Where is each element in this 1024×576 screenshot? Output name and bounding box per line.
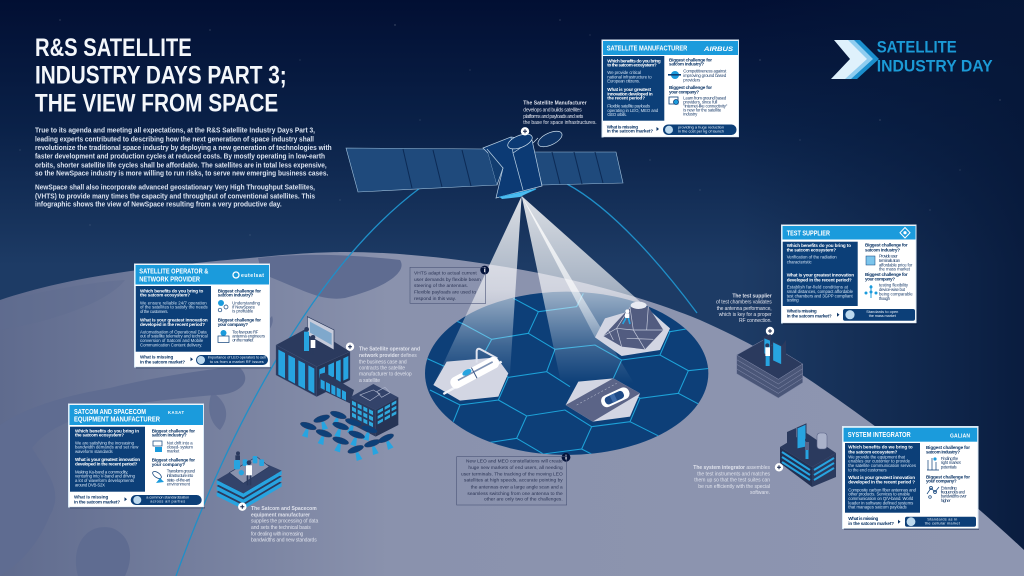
card: satcom and spacecom equipment manufacturer (68, 404, 205, 508)
logo: Satellite Industry Day: INDUSTRY DAY (877, 58, 993, 76)
card: system integrator (842, 426, 979, 530)
left panel: developed in the recent period ? (848, 480, 915, 485)
right column: bandwidths ever (941, 494, 967, 499)
header: SYSTEM INTEGRATOR (848, 430, 911, 439)
right column: your company? (669, 89, 699, 94)
text: satellite manufacturer (523, 101, 597, 126)
small building (350, 384, 398, 437)
right column: your company? (218, 322, 248, 327)
illustration: satcom lab stack (217, 451, 282, 509)
text box: VHTS: respond in this way. (414, 296, 456, 302)
right column: is profitable (232, 309, 254, 314)
right column: environment (167, 482, 191, 487)
right column: your company? (865, 277, 895, 282)
bottom bar: What is missing (140, 355, 173, 360)
header (70, 405, 203, 425)
bottom bar (787, 309, 915, 321)
intro text (35, 128, 332, 209)
right column (668, 57, 728, 116)
header (844, 428, 977, 442)
left panel: that manages satcom payloads (848, 505, 907, 510)
text: satellite operator: The Satellite operator and (359, 347, 420, 353)
intro text: faster development and production cycles at reduced costs. By mostly operating in low-earth (35, 154, 325, 161)
text: satcom manufacturer: supplies the processing of data (251, 519, 319, 525)
dish antennas (506, 128, 564, 152)
right column (926, 445, 970, 503)
left panel: the satcom ecosystem? (848, 449, 897, 454)
left panel (70, 427, 145, 492)
marker: test supplier (766, 327, 774, 335)
left panel: What is your greatest innovation (787, 273, 854, 278)
right column: Too few pure RF (232, 329, 259, 334)
header (603, 41, 738, 55)
text: satcom manufacturer: bandwidths and new standards (251, 538, 317, 544)
header: eutelsat (241, 273, 264, 279)
left panel: Which benefits do you bring to (140, 288, 203, 293)
right column: Biggest challenge for (669, 85, 712, 90)
right column: satcom industry? (865, 247, 900, 252)
bottom bar (848, 516, 976, 527)
right column (218, 288, 265, 343)
right column: higher (941, 498, 951, 503)
left panel: We ensure reliable 24/7 operation (140, 300, 207, 305)
left panel: Which benefits do we bring to (848, 445, 913, 450)
right column: satcom industry? (218, 293, 253, 298)
left panel: the satellite communication services (848, 463, 916, 468)
left panel: the satcom ecosystem? (75, 433, 124, 438)
header: EQUIPMENT MANUFACTURER (74, 414, 161, 424)
right column: industry (683, 111, 698, 116)
body (483, 137, 542, 199)
text box: VHTS: steering of the antennas. (414, 283, 468, 289)
title: INDUSTRY DAYS PART 3; (35, 62, 287, 90)
text: satcom manufacturer: The Satcom and Spacecom (251, 506, 317, 512)
text: satcom manufacturer: for dealing with increasing (251, 531, 304, 537)
bottom bar: What is missing (74, 495, 108, 500)
left panel: innovation developed in (607, 91, 653, 96)
left panel: operating in LEO, MEO and (607, 108, 659, 113)
left panel: leader in software defined systems (848, 500, 913, 505)
text: satellite operator: a satellite (359, 378, 380, 384)
intro text: infographic shows the view of NewSpace resulting from a very productive day. (35, 202, 282, 209)
right column: satcom industry? (152, 433, 187, 438)
text: system integrator: the test instruments and matches (697, 471, 770, 477)
right column: closed- system (167, 444, 193, 449)
right column: providers, since full (683, 99, 717, 104)
right column: Biggest challenge for (865, 272, 908, 277)
right column: Finding the (941, 456, 959, 461)
intro text: orbits, shorter satellite life cycles shall be affordable. The satellites are in total less expensive, (35, 162, 327, 169)
logo: Satellite Industry Day: SATELLITE (877, 39, 957, 57)
platform: car on road (566, 378, 640, 422)
bottom bar: in the satcom market? (848, 521, 894, 526)
left panel: Which benefits do you bring in (75, 428, 139, 433)
right column: testing flexibility (879, 283, 909, 288)
text: test supplier: RF connection. (739, 318, 772, 324)
bottom bar: providing a huge reduction (678, 125, 724, 130)
text: test supplier: of test chambers validates (716, 299, 772, 305)
left panel: communication on Q/V-band. World (848, 496, 914, 501)
right column: antenna engineers (232, 333, 265, 338)
left panel: bandwidth demands and set new (75, 445, 139, 450)
text box: LEO and MEO (457, 457, 567, 505)
right column: frequencies and (941, 489, 966, 494)
left panel: the satcom ecosystem? (787, 247, 836, 252)
bottom bar: Importance of LEO operators to sell (208, 355, 266, 360)
left panel (783, 242, 858, 306)
right column: Biggest challenge for (865, 243, 908, 248)
text box: LEO and MEO: satellites at high speeds, accurate pointing by (464, 478, 563, 484)
platform: mountain hiker (595, 302, 670, 356)
right column: terminals at an (879, 258, 901, 263)
text: test supplier: The test supplier (732, 293, 772, 299)
text box: LEO and MEO: user terminals. The tracking of the moving LEO (461, 472, 563, 478)
left panel: We provide the equipment that (848, 454, 906, 459)
header: SATELLITE MANUFACTURER (607, 44, 688, 52)
left panel: What is your greatest innovation (140, 317, 208, 322)
right column: Biggest challenge for (218, 288, 261, 293)
text: satellite manufacturer: The Satellite Manufacturer (523, 101, 587, 107)
left solar panel (346, 148, 497, 192)
left panel: venturing into V-band and driving (75, 474, 136, 479)
title: THE VIEW FROM SPACE (35, 90, 278, 118)
text: system integrator: them up so that the test suites can (694, 478, 770, 484)
text: satellite manufacturer: develops and builds satellites (523, 107, 582, 113)
bottom bar (140, 355, 268, 365)
marker: operator (346, 342, 354, 351)
text box: VHTS: VHTS adapt to actual current (414, 270, 477, 276)
left panel: Which benefits do you bring (607, 58, 661, 63)
card: satellite manufacturer (602, 40, 740, 138)
left panel: testing (787, 297, 799, 302)
right column: Biggest challenge for (926, 445, 970, 450)
left panel: other products. Services to enable (848, 492, 911, 497)
right column: Biggest challenge for (218, 318, 261, 323)
card: satellite operator and network provider (134, 264, 271, 368)
left panel: to the end customers (848, 467, 887, 472)
right column: improving ground based (683, 73, 727, 78)
card: test supplier (782, 225, 917, 324)
text box: LEO and MEO: other are only two of the challenges. (484, 497, 563, 503)
bottom bar (607, 124, 736, 135)
bottom bar: the mass market (869, 313, 897, 318)
text box: VHTS: Flexible payloads are used to (414, 289, 476, 295)
text: satcom manufacturer: and sets the technical basis (251, 525, 311, 531)
text: system integrator: be run efficiently with the special (698, 484, 770, 490)
left panel (845, 443, 920, 513)
title: R&S SATELLITE (35, 34, 192, 62)
right column: though (879, 296, 891, 301)
title (35, 34, 287, 118)
header: GALIAN (950, 433, 970, 439)
header: SATELLITE OPERATOR & (139, 266, 209, 275)
logo: Satellite Industry Day (831, 39, 993, 79)
bottom bar: to us from a market RF issues (210, 359, 264, 364)
right column: affordable price for (879, 262, 913, 267)
bottom bar: What is missing (787, 309, 817, 314)
text: system integrator: software. (750, 490, 770, 496)
text: test supplier (716, 293, 772, 324)
left panel: developed in the recent period? (75, 462, 137, 467)
marker: LEO MEO info (562, 453, 570, 462)
right column: Biggest challenge for (926, 474, 970, 479)
left panel (136, 286, 211, 352)
right column: your company? (926, 479, 957, 484)
right column: Biggest challenge for (152, 458, 195, 463)
right column: satcom industry? (926, 449, 960, 454)
right solar panel (533, 152, 623, 185)
text: satellite manufacturer: the base for space infrastructures. (523, 120, 597, 126)
header: KASAT (168, 410, 184, 415)
left panel (603, 56, 664, 121)
right column: potentials (941, 464, 957, 469)
text box: VHTS: user demands by flexible beam (414, 277, 481, 283)
right column: the mass market (879, 267, 911, 272)
left panel: test chambers and 3GPP compliant (787, 293, 853, 298)
right column: infrastructure into (167, 473, 194, 478)
text box: LEO and MEO: the antennas over a large angle scan and a (471, 485, 563, 491)
intro text: NewSpace shall also incorporate advanced geostationary Very High Throughput Satellites, (35, 185, 315, 192)
right column: Understanding (232, 300, 261, 305)
illustration: system integrator stack (780, 424, 836, 487)
text: satellite operator: contracts the satellite (359, 366, 405, 372)
earth globe (0, 252, 1024, 576)
left panel: What is your greatest innovation (75, 457, 140, 462)
left panel: small distances, compact affordable (787, 289, 854, 294)
wall screen (307, 317, 334, 350)
right column (864, 243, 913, 301)
bottom bar: across all parties (150, 499, 185, 504)
header (136, 265, 269, 284)
header: SATCOM AND SPACECOM (74, 407, 146, 416)
text box: LEO and MEO: New LEO and MEO constellations will create (466, 459, 563, 465)
left panel: waveform standards (75, 449, 113, 454)
marker: satcom manufacturer (238, 502, 246, 511)
corridor (318, 373, 354, 403)
left panel: Automatisation of Operational Data (140, 329, 207, 334)
bottom bar: Standards as in (927, 516, 957, 522)
left panel: We provide critical (607, 70, 641, 75)
bottom bar: in the satcom market? (607, 129, 653, 134)
text: test supplier: the antenna performance, (717, 306, 772, 312)
left panel: Establish far-field conditions at (787, 285, 849, 290)
text box: VHTS (410, 267, 486, 303)
illustration: operator building, small building and dish field (217, 317, 398, 509)
left panel: Verification of the radiation (787, 255, 837, 260)
left panel: of the satellites to satisfy the needs (140, 305, 208, 310)
right column: device-wise but (879, 287, 906, 292)
right column: satcom industry? (669, 62, 704, 67)
header: TEST SUPPLIER (787, 228, 830, 237)
earth land masses (0, 255, 402, 576)
illustration: test chamber stack (737, 334, 803, 398)
left panel: characteristic (787, 259, 813, 264)
right column: right market (941, 460, 961, 465)
left panel: GEO orbits. (607, 112, 627, 117)
right column: Learn from ground based (683, 95, 727, 100)
bottom bar: in the satcom market? (74, 499, 120, 504)
left panel: a lot of waveform developments (75, 478, 134, 483)
hexagon coverage disc with platforms (425, 196, 710, 457)
right column: Competitiveness against (683, 69, 727, 74)
bottom bar: in the cost per kg of launch (678, 129, 724, 134)
bottom bar: a common standardization (146, 494, 189, 500)
left panel: enables our customer to provide (848, 459, 911, 464)
right column: "internet-like connectivity" (683, 103, 728, 108)
left panel: the recent period? (607, 96, 645, 101)
right column: Not drift into a (167, 440, 193, 445)
right column: on the market (232, 338, 254, 343)
right column: Biggest challenge for (152, 428, 195, 433)
right column: providers (683, 77, 700, 82)
right column: Provide user (879, 254, 898, 259)
intro text: True to its agenda and meeting all expectations, at the R&S Satellite Industry Days Part 3, (35, 128, 315, 135)
intro text: leading experts contributed to describing how the next generation of space industry shall (35, 136, 314, 143)
right column: your company? (152, 462, 185, 467)
intro text: so the NewSpace industry is more willing to run risks, to serve new emerging business cases. (35, 171, 328, 178)
text: satcom manufacturer (251, 506, 319, 544)
text: satellite operator (359, 347, 420, 384)
left panel: national infrastructure to (607, 74, 652, 79)
right column: market (167, 449, 180, 454)
bottom bar: What is missing (848, 516, 878, 521)
intro text: (VHTS) to provide many times the capacity and throughput of conventional satellites. This (35, 193, 315, 200)
left panel: developed in the recent period? (140, 322, 205, 327)
two people at the screen (304, 327, 315, 355)
right column: Extending (941, 485, 957, 490)
text box: LEO and MEO: seamless switching from one antenna to the (467, 491, 563, 497)
text box: LEO and MEO: huge new markets of end users, all needing (468, 465, 563, 471)
text: satellite operator: manufacturer to develop (359, 372, 412, 378)
left panel: European citizens. (607, 79, 640, 84)
bottom bar: in the satcom market? (787, 313, 832, 318)
bottom bar: the cellular market (925, 521, 961, 526)
left panel: to the satcom ecosystem? (607, 62, 657, 67)
right column: state- of-the-art (167, 477, 191, 482)
left panel: What is your greatest innovation (848, 475, 915, 480)
left panel: Making Ka-band a commodity, (75, 469, 128, 474)
left panel: conversion of Satcom and Mobile (140, 338, 204, 343)
left panel: What is your greatest (607, 87, 651, 92)
left panel: Composite carbon fiber antennas and (848, 487, 917, 492)
left panel: Which benefits do you bring to (787, 243, 851, 248)
text: satcom manufacturer: equipment manufacturer (251, 512, 310, 518)
right column: if NewSpace (232, 304, 256, 309)
left panel: around DVB-S2X (75, 482, 105, 487)
header: AIRBUS (703, 46, 734, 53)
left panel: of the customers. (140, 309, 168, 314)
bottom bar (74, 494, 202, 505)
left panel: the satcom ecosystem? (140, 293, 190, 298)
marker: system integrator (775, 463, 783, 472)
marker: VHTS info (480, 266, 489, 274)
text: satellite operator: network provider defines (359, 353, 417, 359)
text: test supplier: which is key for a proper (719, 312, 772, 318)
marker: satellite manufacturer (521, 127, 529, 136)
bottom bar: What is missing (607, 125, 638, 130)
platform: high-speed train (433, 349, 508, 401)
right column: is new for the satellite (683, 107, 722, 112)
intro text: revolutionize the traditional space industry by deploying a new generation of technologies with (35, 145, 332, 152)
text: satellite manufacturer: platforms and payloads and sets (523, 114, 584, 120)
text: system integrator: The system integrator assembles (693, 465, 770, 471)
text: system integrator (693, 465, 770, 496)
main building (276, 327, 350, 397)
text: satellite operator: the business case and (359, 359, 407, 365)
bottom bar: Standards to open (866, 309, 898, 314)
right column: being comparable (879, 292, 913, 297)
right column: Transform ground (167, 469, 196, 474)
light beams from satellite (433, 196, 670, 405)
left panel: Communication Content delivery. (140, 342, 202, 347)
left panel: developed in the recent period? (787, 277, 852, 282)
header: NETWORK PROVIDER (139, 274, 201, 283)
left panel: Flexible satellite payloads (607, 104, 650, 109)
right column (151, 428, 196, 487)
bottom bar: in the satcom market? (140, 359, 185, 364)
left panel: We are satisfying the increasing (75, 440, 135, 445)
satellite (346, 128, 623, 199)
right column: Biggest challenge for (669, 57, 712, 62)
left panel: out of satellite telemetry and technical (140, 334, 208, 339)
dish antenna field (297, 410, 398, 463)
orbit line (176, 184, 697, 576)
